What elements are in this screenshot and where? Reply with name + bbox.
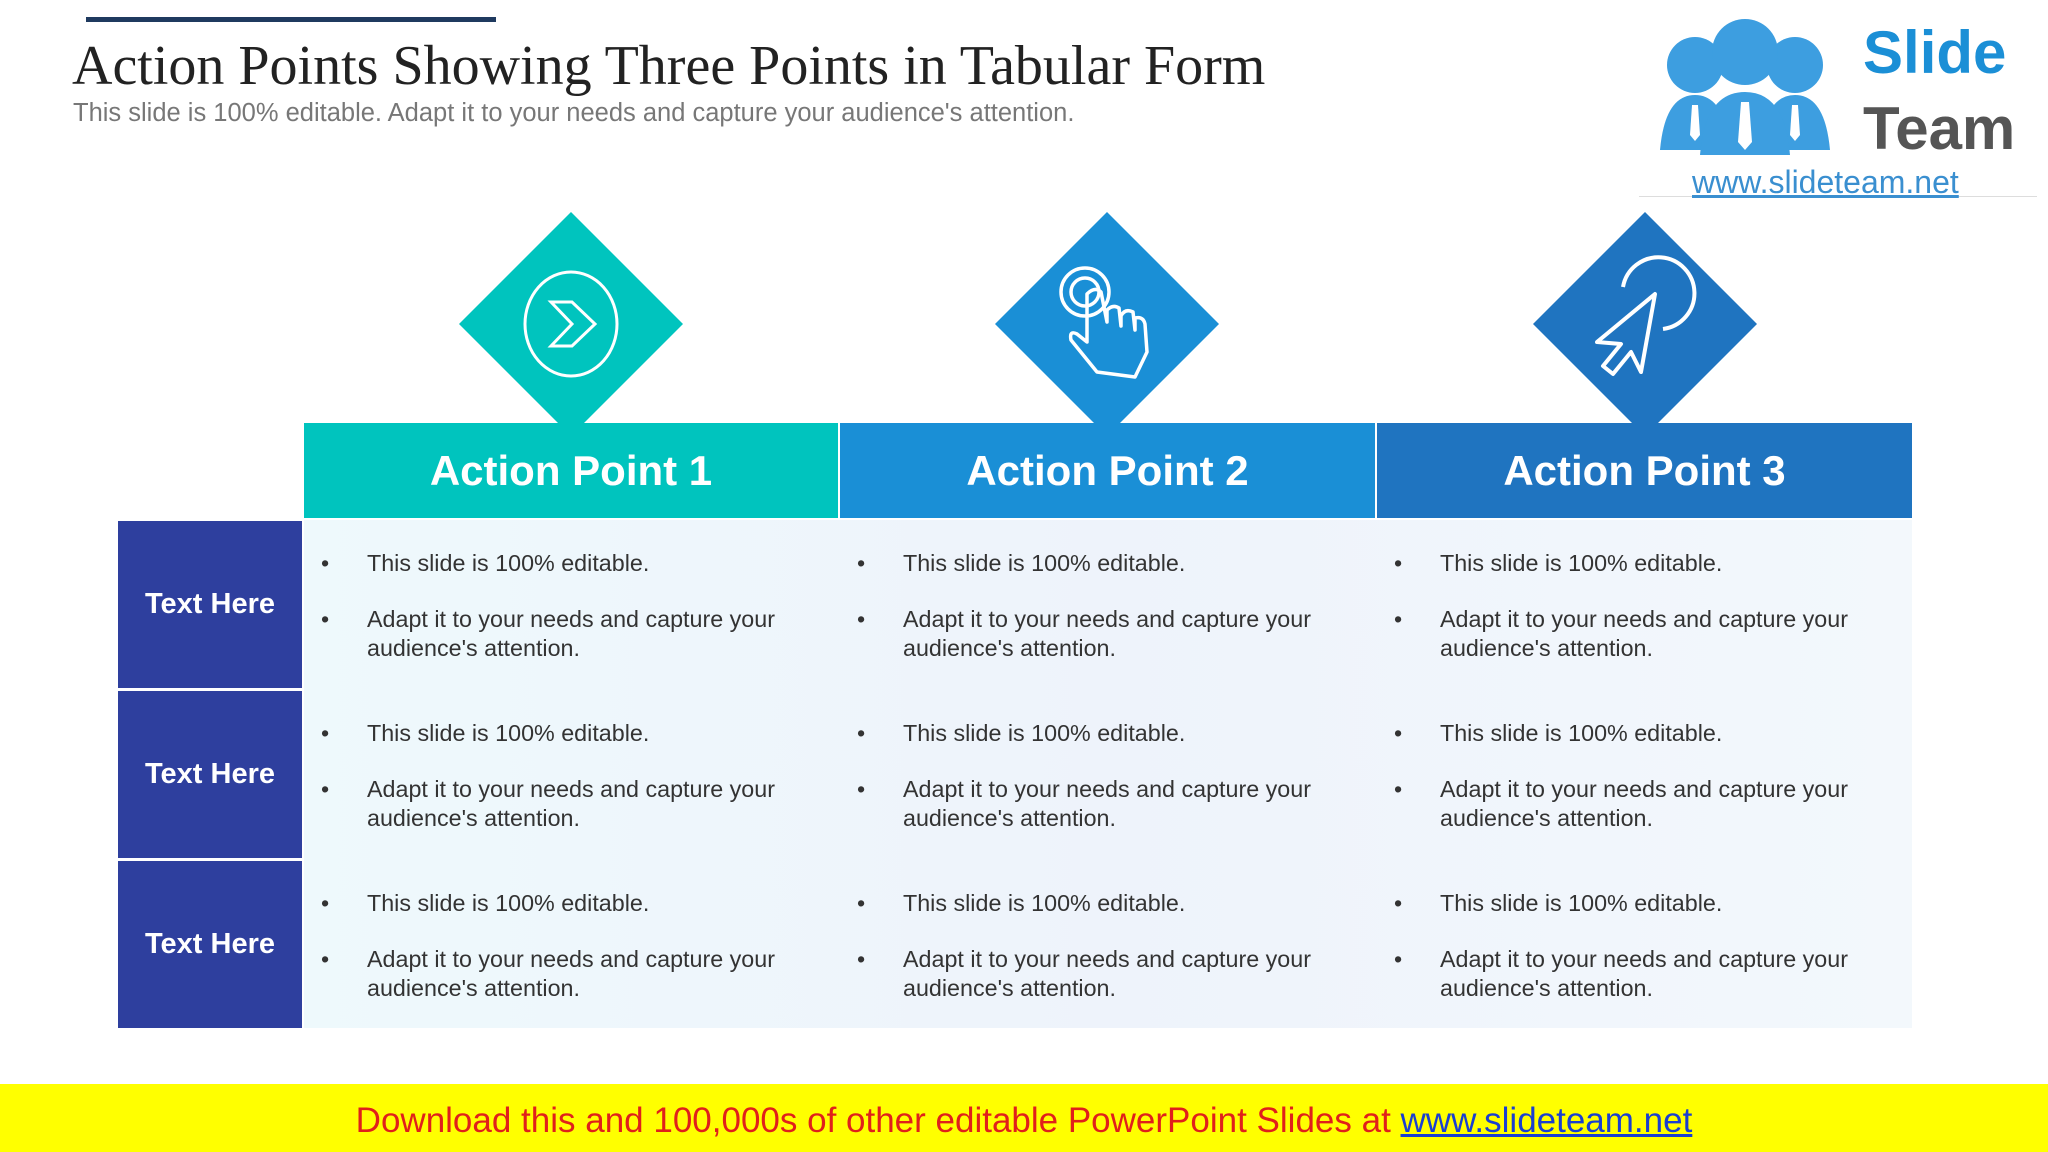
cells: Adapt it to your needs and capture your [1440,946,1848,972]
title: Action Points Showing Three Points in Tabular Form [72,35,1265,97]
cells: audience's attention. [903,635,1116,661]
cells: audience's attention. [367,635,580,661]
table body background [304,520,1912,1028]
cells: This slide is 100% editable. [903,550,1185,576]
cells: audience's attention. [903,805,1116,831]
row label 2 [118,691,302,858]
header: Action Point 2: Action Point 2 [966,446,1249,494]
cells: This slide is 100% editable. [367,550,649,576]
icon diamond 2: hand tap [995,212,1219,423]
cells: audience's attention. [903,975,1116,1001]
header: Action Point 3 [1377,423,1912,518]
footer banner: www.slideteam.net [1401,1101,1692,1140]
cells: Adapt it to your needs and capture your [903,946,1311,972]
cells: • [1394,550,1402,576]
cells: • [1394,776,1402,802]
cells: • [1394,946,1402,972]
cells: This slide is 100% editable. [903,890,1185,916]
cells: This slide is 100% editable. [903,720,1185,746]
icon diamond 1: chevron [459,212,683,423]
cells: Adapt it to your needs and capture your [1440,606,1848,632]
logo: Slide [1863,19,2006,86]
cells: • [321,606,329,632]
cells: audience's attention. [367,805,580,831]
cells: • [321,776,329,802]
cells: audience's attention. [367,975,580,1001]
footer banner [0,1084,2048,1152]
row label 1 [118,521,302,688]
cells: This slide is 100% editable. [1440,890,1722,916]
cells: • [321,550,329,576]
logo: www.slideteam.net [1692,164,1959,200]
cells: Adapt it to your needs and capture your [367,776,775,802]
footer banner: Download this and 100,000s of other editable PowerPoint Slides at [356,1101,1391,1140]
cells: Adapt it to your needs and capture your [1440,776,1848,802]
cells: This slide is 100% editable. [367,890,649,916]
top accent line [86,17,496,22]
logo: Team [1863,95,2015,162]
cells: • [1394,890,1402,916]
cells: This slide is 100% editable. [367,720,649,746]
cells: audience's attention. [1440,635,1653,661]
header: Action Point 1 [304,423,838,518]
cells: • [857,946,865,972]
cells: • [321,720,329,746]
header: Action Point 1: Action Point 1 [430,446,712,494]
cells: Adapt it to your needs and capture your [903,776,1311,802]
row label 3 [118,861,302,1028]
cells: • [857,890,865,916]
row label 2: Text Here [145,758,275,790]
cells: This slide is 100% editable. [1440,720,1722,746]
row label 1: Text Here [145,588,275,620]
cells: • [321,890,329,916]
cells: • [857,606,865,632]
icon diamond 3: cursor [1533,212,1757,423]
cells: Adapt it to your needs and capture your [903,606,1311,632]
cells: • [857,776,865,802]
cells: audience's attention. [1440,805,1653,831]
header: Action Point 2 [840,423,1375,518]
cells: audience's attention. [1440,975,1653,1001]
header: Action Point 3: Action Point 3 [1503,446,1786,494]
cells: • [1394,606,1402,632]
cells: Adapt it to your needs and capture your [367,946,775,972]
cells: Adapt it to your needs and capture your [367,606,775,632]
cells: • [857,550,865,576]
logo [1639,0,2037,197]
cells: This slide is 100% editable. [1440,550,1722,576]
cells: • [1394,720,1402,746]
cells: • [321,946,329,972]
cells: • [857,720,865,746]
row label 3: Text Here [145,928,275,960]
subtitle: This slide is 100% editable. Adapt it to your needs and capture your audience's attention. [73,99,1074,127]
